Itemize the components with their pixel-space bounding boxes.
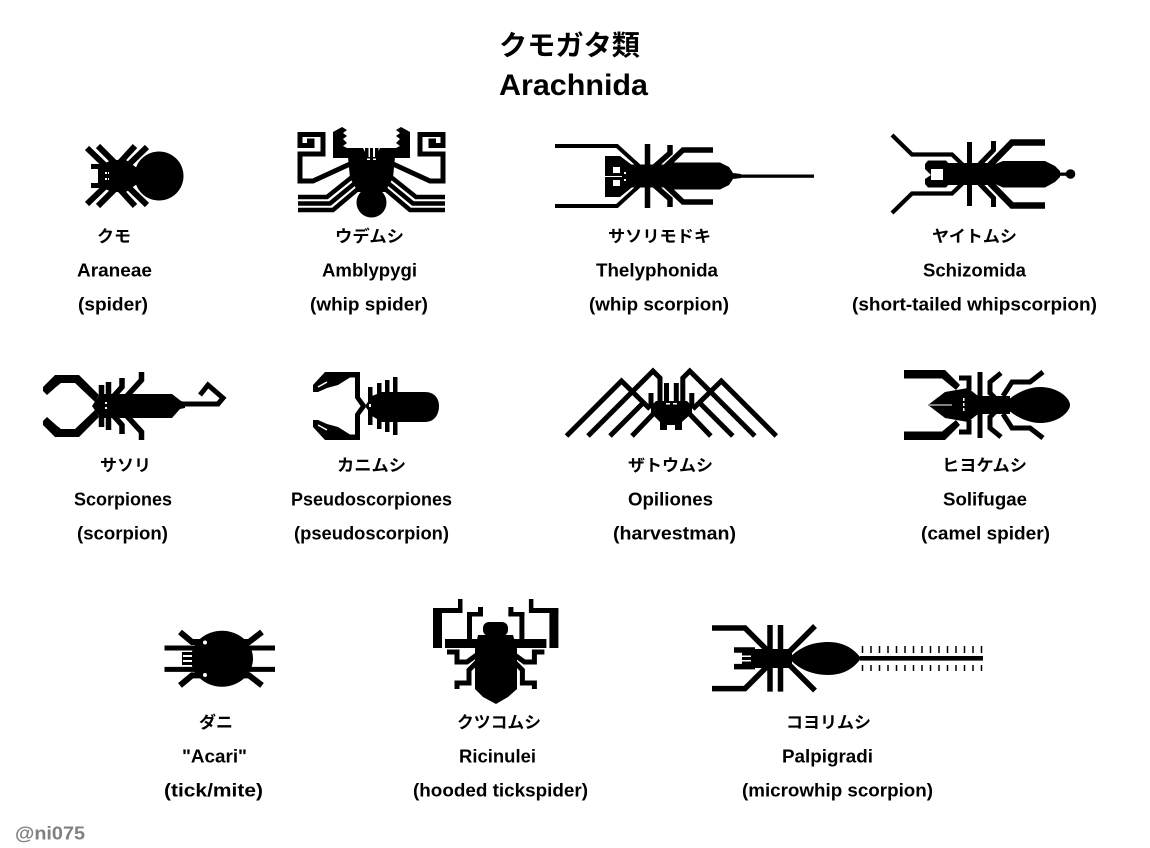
icon: camel spider [904, 370, 1070, 440]
icon: harvestman [566, 371, 776, 436]
panel: scorpion [43, 372, 223, 544]
panel: pseudoscorpion [291, 372, 452, 544]
label: harvestman: (harvestman) [613, 522, 736, 544]
title: クモガタ類 [499, 30, 640, 61]
icon: tick/mite [164, 631, 275, 687]
label: tick/mite: (tick/mite) [164, 780, 263, 800]
label: short-tailed whipscorpion: Schizomida [923, 260, 1027, 280]
panel: hooded tickspider [413, 599, 588, 800]
panel: short-tailed whipscorpion [852, 135, 1097, 314]
label: hooded tickspider: Ricinulei [459, 746, 536, 766]
icon: whip scorpion [555, 144, 814, 208]
icon: spider [87, 146, 184, 206]
label: camel spider: ヒヨケムシ [942, 456, 1027, 475]
label: spider: クモ [97, 227, 131, 246]
label: camel spider: (camel spider) [921, 522, 1050, 544]
label: whip spider: Amblypygi [322, 260, 417, 280]
icon: microwhip scorpion [712, 625, 983, 692]
panel: whip spider [298, 127, 445, 314]
panel: camel spider [904, 370, 1070, 544]
label: whip spider: ウデムシ [335, 226, 404, 246]
label: spider: Araneae [77, 260, 152, 280]
label: scorpion: (scorpion) [77, 522, 168, 544]
label: microwhip scorpion: Palpigradi [782, 746, 873, 766]
label: hooded tickspider: クツコムシ [457, 713, 541, 732]
label: microwhip scorpion: (microwhip scorpion) [742, 780, 933, 800]
label: camel spider: Solifugae [943, 488, 1027, 510]
label: pseudoscorpion: カニムシ [337, 456, 406, 475]
label: microwhip scorpion: コヨリムシ [786, 714, 871, 732]
label: whip spider [310, 226, 428, 314]
label: hooded tickspider: (hooded tickspider) [413, 780, 588, 800]
panel: tick/mite [164, 631, 275, 800]
icon: whip spider [298, 127, 445, 218]
label: scorpion: サソリ [100, 457, 151, 475]
icon: short-tailed whipscorpion [892, 135, 1075, 213]
label: whip scorpion [589, 228, 729, 314]
credit: @ni075 [15, 824, 85, 844]
label: harvestman [613, 456, 736, 544]
icon: pseudoscorpion [313, 372, 439, 440]
label: scorpion: Scorpiones [74, 488, 172, 510]
label: hooded tickspider [413, 713, 588, 800]
label: harvestman: ザトウムシ [628, 456, 713, 475]
label: camel spider [921, 456, 1050, 544]
panel: spider [77, 146, 184, 314]
icon: scorpion [43, 372, 223, 440]
panel: whip scorpion [555, 144, 814, 314]
label: spider [77, 227, 152, 314]
title: Arachnida [499, 69, 648, 102]
label: tick/mite [164, 712, 263, 800]
label: whip scorpion: サソリモドキ [608, 228, 711, 246]
label: tick/mite: ダニ [199, 712, 233, 732]
label: pseudoscorpion: (pseudoscorpion) [294, 522, 449, 544]
label: pseudoscorpion [291, 456, 452, 544]
panel: microwhip scorpion [712, 625, 983, 800]
label: short-tailed whipscorpion: ヤイトムシ [932, 228, 1017, 246]
label: microwhip scorpion [742, 714, 933, 800]
label: spider: (spider) [78, 294, 148, 314]
label: scorpion [74, 457, 172, 544]
label: harvestman: Opiliones [628, 488, 713, 510]
label: whip spider: (whip spider) [310, 294, 428, 314]
label: short-tailed whipscorpion [852, 228, 1097, 314]
label: whip scorpion: (whip scorpion) [589, 294, 729, 314]
label: whip scorpion: Thelyphonida [596, 260, 719, 280]
title [499, 30, 648, 102]
panel: harvestman [566, 371, 776, 544]
label: tick/mite: "Acari" [182, 746, 247, 766]
label: pseudoscorpion: Pseudoscorpiones [291, 488, 452, 510]
label: short-tailed whipscorpion: (short-tailed whipscorpion) [852, 294, 1097, 314]
icon: hooded tickspider [433, 599, 558, 704]
